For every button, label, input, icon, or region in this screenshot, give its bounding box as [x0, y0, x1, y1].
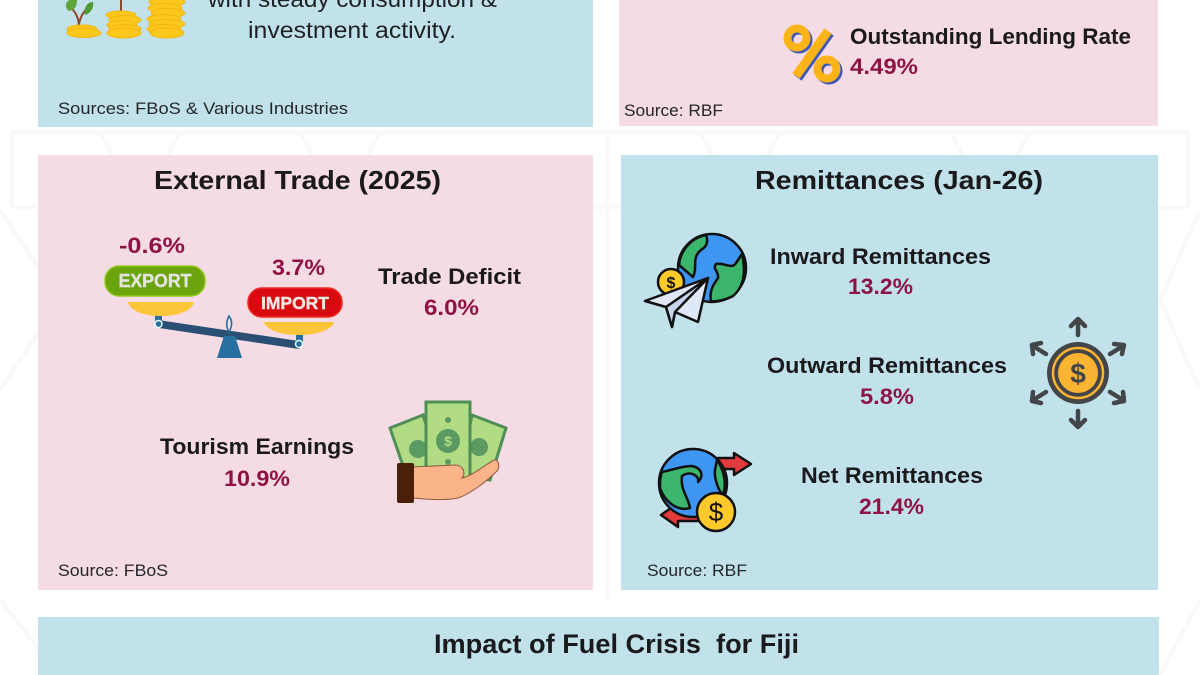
metric: tourism earnings: 10.9% [224, 466, 290, 491]
metric: tourism earnings [160, 434, 354, 491]
panel: lending rate [619, 0, 1158, 126]
metric: outward remittances: 5.8% [860, 384, 914, 409]
heading: Remittances (Jan-26) [755, 165, 1043, 195]
panel: remittances [621, 155, 1158, 590]
heading: External Trade (2025) [154, 165, 441, 195]
icon: export import balance scale: IMPORT [261, 293, 329, 313]
panel: impact of fuel crisis [38, 617, 1159, 675]
panel: economic activity [38, 0, 593, 127]
panel: external trade [38, 155, 593, 590]
metric: outstanding lending rate: Outstanding Lending Rate [850, 24, 1131, 49]
source note: Source: RBF [647, 561, 747, 580]
source note: Sources: FBoS & Various Industries [58, 99, 348, 118]
icon: hand holding banknotes: $ [444, 433, 452, 449]
icon: growing coin stacks [66, 0, 185, 38]
metric: net remittances: 21.4% [859, 494, 924, 519]
icon: hand holding banknotes [390, 402, 506, 503]
icon: dollar coin with outward arrows: $ [1070, 358, 1086, 389]
metric: inward remittances [770, 244, 991, 299]
metric: trade deficit: 6.0% [424, 295, 479, 320]
metric: net remittances [801, 463, 983, 519]
metric: outstanding lending rate: 4.49% [850, 54, 918, 79]
icon: export import balance scale: EXPORT [118, 271, 192, 291]
metric: export change: -0.6% [119, 233, 185, 258]
text: activity summary [207, 0, 497, 43]
metric: outstanding lending rate [850, 24, 1131, 79]
source note: Source: FBoS [58, 561, 168, 580]
heading: Impact of Fuel Crisis for Fiji [434, 629, 799, 659]
metric: tourism earnings: Tourism Earnings [160, 434, 354, 459]
icon: globe with exchange arrows: $ [709, 497, 724, 527]
icon: dollar coin with outward arrows [1032, 319, 1124, 427]
icon: globe with paper plane [645, 234, 746, 327]
metric: inward remittances: Inward Remittances [770, 244, 991, 269]
icon: export import balance scale [105, 266, 342, 358]
metric: trade deficit [378, 264, 522, 320]
icon: globe with exchange arrows [659, 449, 751, 531]
source note: Source: RBF [624, 101, 723, 120]
metric: import change: 3.7% [272, 255, 325, 280]
icon: globe with paper plane: $ [667, 275, 676, 292]
text: activity summary: investment activity. [248, 17, 456, 43]
metric: outward remittances [767, 353, 1007, 409]
metric: outward remittances: Outward Remittances [767, 353, 1007, 378]
icon: percent sign [788, 28, 838, 80]
metric: trade deficit: Trade Deficit [378, 264, 522, 289]
metric: inward remittances: 13.2% [848, 274, 913, 299]
metric: net remittances: Net Remittances [801, 463, 983, 488]
